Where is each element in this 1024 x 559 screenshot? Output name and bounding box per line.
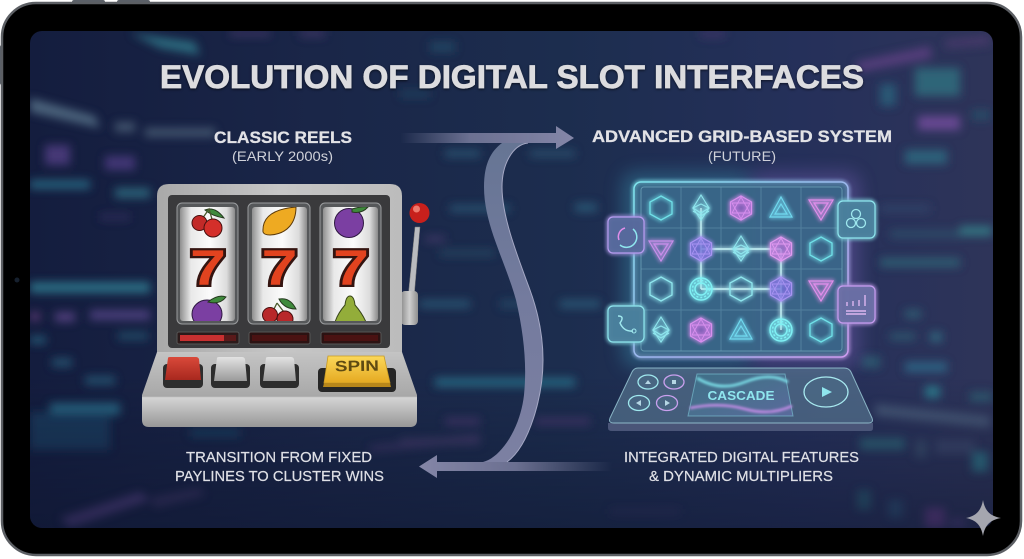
heading: advanced grid-based system: (FUTURE): [708, 148, 776, 164]
heading: advanced grid-based system: [592, 127, 892, 164]
caption: transition from fixed paylines: [175, 450, 384, 485]
cabinet upper: [157, 184, 402, 358]
reel 2 symbols: [262, 207, 296, 327]
heading: classic reels: (EARLY 2000s): [232, 148, 333, 164]
arrow: S-curve connector: [483, 143, 543, 462]
reel panel: [168, 195, 390, 348]
caption: transition from fixed paylines: PAYLINES TO CLUSTER WINS: [175, 469, 384, 485]
slot machine illustration: [142, 184, 430, 427]
side tile: path nodes: [608, 306, 644, 342]
heading: classic reels: CLASSIC REELS: [214, 128, 352, 147]
heading: advanced grid-based system: ADVANCED GRID-BASED SYSTEM: [592, 127, 892, 146]
side tile: three circles: [838, 201, 875, 238]
reel 1 symbols: [192, 209, 226, 328]
arrow: advanced to classic: [419, 455, 612, 478]
control console: [608, 368, 873, 431]
spin button: SPIN: [335, 358, 379, 375]
side tile: spinner: [608, 217, 644, 253]
caption: integrated digital features: & DYNAMIC MULTIPLIERS: [649, 469, 833, 485]
cabinet base: [142, 352, 417, 427]
arrow: classic to advanced: [400, 126, 574, 149]
play button: [804, 377, 848, 407]
heading: classic reels: [214, 128, 352, 164]
side tile: multiplier bars: [838, 286, 875, 323]
caption: integrated digital features: INTEGRATED DIGITAL FEATURES: [624, 450, 859, 466]
sparkle watermark: [966, 500, 1001, 536]
title: EVOLUTION OF DIGITAL SLOT INTERFACES: [160, 59, 864, 95]
lucky sevens: 7: [190, 240, 226, 296]
gem symbols: [649, 195, 833, 342]
credit meters: [177, 332, 381, 344]
cascade panel: CASCADE: [708, 388, 775, 403]
lucky sevens: 7: [262, 240, 298, 296]
caption: transition from fixed paylines: TRANSITION FROM FIXED: [186, 450, 372, 466]
lever: [401, 203, 430, 325]
spin button: [318, 356, 396, 392]
cluster win connectors: [701, 208, 781, 330]
lucky sevens: [190, 240, 369, 296]
buttons: [163, 357, 299, 388]
holographic grid panel: [622, 172, 860, 367]
lucky sevens: 7: [333, 240, 369, 296]
caption: integrated digital features: [624, 450, 859, 485]
small control buttons: [628, 375, 684, 410]
cascade panel: [688, 374, 793, 416]
reel 3 symbols: [334, 207, 368, 322]
